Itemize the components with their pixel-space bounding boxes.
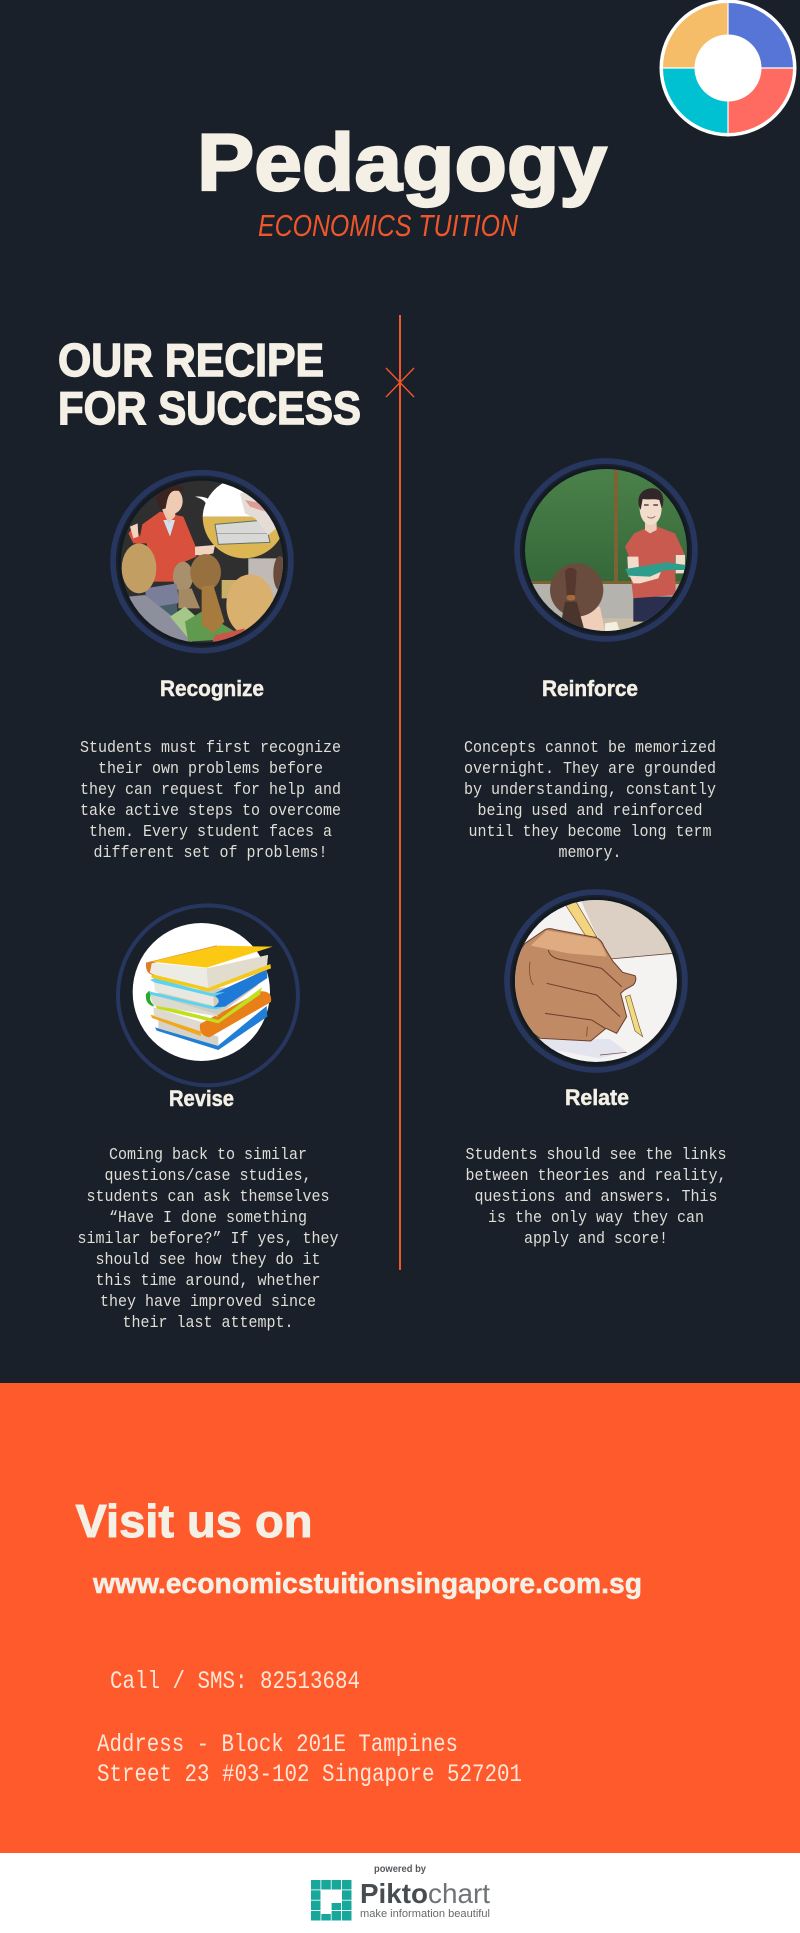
phone number: Call / SMS: 82513684 — [110, 1667, 360, 1696]
text: Reinforce body: by understanding, constantly — [464, 781, 716, 800]
heading: Relate: Relate — [565, 1085, 629, 1110]
section heading: OUR RECIPE — [58, 334, 324, 386]
Piktochart wordmark: Pikto — [360, 1878, 428, 1909]
heading: Reinforce: Reinforce — [542, 676, 638, 701]
icon: hand writing with pencil — [507, 892, 685, 1070]
icon: colour donut logo — [660, 0, 796, 136]
icon: Piktochart logo — [311, 1880, 352, 1920]
text: Revise body: similar before?” If yes, they — [78, 1230, 338, 1249]
text: Recognize body: their own problems before — [98, 760, 323, 779]
text: Revise body: this time around, whether — [96, 1272, 320, 1291]
text: Relate body: between theories and reality, — [466, 1167, 726, 1186]
heading: Recognize: Recognize — [160, 676, 264, 701]
heading: Revise: Revise — [169, 1086, 234, 1111]
text: Reinforce body: being used and reinforced — [478, 802, 702, 821]
icon: teacher in front of class — [113, 473, 291, 651]
panel: dark background — [0, 0, 800, 1383]
text: Revise body: should see how they do it — [96, 1251, 320, 1270]
text: Revise body: students can ask themselves — [86, 1188, 330, 1207]
text: Revise body: they have improved since — [100, 1293, 316, 1312]
powered by label: powered by — [374, 1863, 426, 1875]
text: Reinforce body — [464, 739, 716, 863]
title: Pedagogy — [197, 118, 607, 208]
text: Revise body: “Have I done something — [109, 1209, 307, 1228]
vertical divider with cross mark — [386, 315, 414, 1270]
Piktochart wordmark: chart — [428, 1878, 490, 1909]
address — [97, 1730, 522, 1789]
subtitle: ECONOMICS TUITION — [258, 208, 518, 243]
icon: teacher with book — [517, 461, 695, 639]
panel: contact footer — [0, 1383, 800, 1853]
text: Recognize body: Students must first recognize — [80, 739, 341, 758]
text: Recognize body: they can request for help and — [80, 781, 341, 800]
text: Recognize body — [80, 739, 341, 863]
address: Street 23 #03-102 Singapore 527201 — [97, 1760, 522, 1789]
text: Recognize body: them. Every student faces a — [89, 823, 332, 842]
website url: www.economicstuitionsingapore.com.sg — [92, 1568, 642, 1600]
text: Reinforce body: Concepts cannot be memorized — [464, 739, 716, 758]
icon: stack of books — [118, 905, 298, 1085]
panel: attribution bar — [0, 1853, 800, 1933]
text: Revise body: their last attempt. — [122, 1314, 294, 1333]
text: Relate body: questions and answers. This — [474, 1188, 718, 1207]
text: Relate body: apply and score! — [524, 1230, 668, 1249]
heading: Visit us on: Visit us on — [76, 1495, 312, 1547]
section heading — [58, 334, 361, 434]
text: Reinforce body: until they become long term — [468, 823, 712, 842]
text: Relate body — [466, 1146, 726, 1249]
text: Revise body — [78, 1146, 338, 1333]
text: Recognize body: different set of problems! — [94, 844, 328, 863]
address: Address - Block 201E Tampines — [97, 1730, 458, 1759]
section heading: FOR SUCCESS — [58, 382, 361, 434]
text: Relate body: Students should see the links — [466, 1146, 726, 1165]
Piktochart wordmark — [360, 1878, 490, 1920]
text: Recognize body: take active steps to overcome — [80, 802, 341, 821]
text: Revise body: Coming back to similar — [109, 1146, 307, 1165]
text: Relate body: is the only way they can — [488, 1209, 704, 1228]
text: Reinforce body: memory. — [558, 844, 622, 863]
text: Revise body: questions/case studies, — [104, 1167, 312, 1186]
text: Reinforce body: overnight. They are grounded — [464, 760, 716, 779]
Piktochart wordmark: make information beautiful — [360, 1908, 490, 1920]
